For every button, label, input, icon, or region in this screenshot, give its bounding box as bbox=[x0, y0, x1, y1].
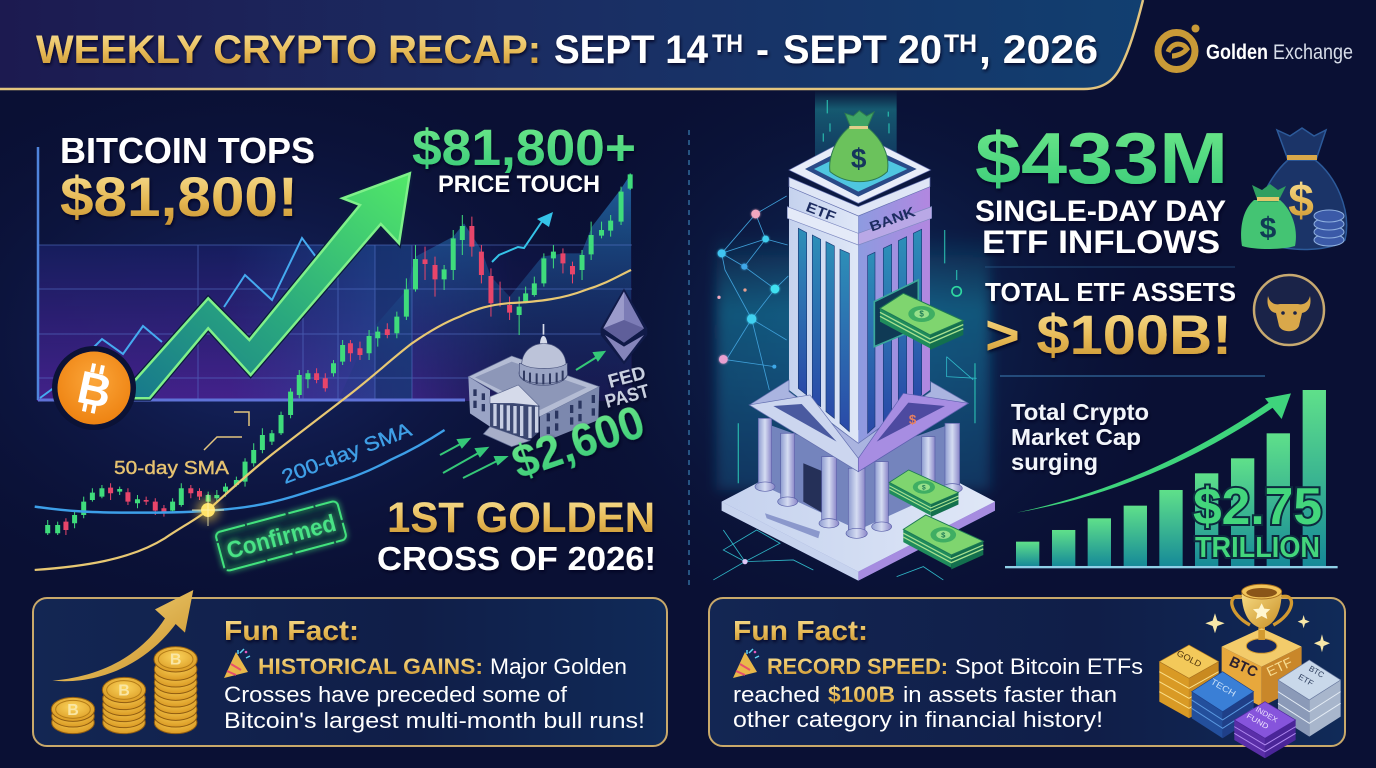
icon: party popper bbox=[733, 649, 759, 678]
tower windows bbox=[798, 228, 922, 433]
value: $2.75 trillion bbox=[1193, 478, 1322, 564]
title: TH bbox=[712, 30, 743, 58]
divider line bbox=[1000, 375, 1265, 377]
icon: money bags: $ bbox=[1260, 212, 1277, 245]
total ETF assets: TOTAL ETF ASSETS bbox=[985, 277, 1236, 307]
panel: ETF building illustration bbox=[713, 90, 995, 581]
golden cross point bbox=[192, 494, 224, 526]
label: Fed past: FED bbox=[606, 363, 648, 393]
title: SEPT 14 bbox=[554, 28, 709, 72]
base axis bbox=[1005, 566, 1338, 568]
BTC ETF cube bbox=[1222, 628, 1302, 707]
50-day SMA line bbox=[35, 270, 631, 570]
silver stack: ETF bbox=[1297, 672, 1315, 688]
panel: market cap chart bbox=[1005, 390, 1338, 568]
fun fact text: reached bbox=[733, 682, 820, 707]
label: market cap: Market Cap bbox=[1011, 424, 1141, 450]
purple stack bbox=[1234, 702, 1296, 758]
title: WEEKLY CRYPTO RECAP: bbox=[36, 28, 541, 72]
bitcoin coin: B bbox=[73, 360, 116, 418]
building portico wall bbox=[762, 423, 957, 530]
price touch label bbox=[412, 119, 636, 198]
purple stack: FUND bbox=[1245, 711, 1270, 731]
BTC ETF cube: ETF bbox=[1264, 654, 1295, 679]
fun fact text bbox=[733, 654, 1143, 732]
fun fact text bbox=[224, 654, 645, 733]
gold stack bbox=[1159, 645, 1219, 718]
teal glow columns bbox=[717, 90, 990, 490]
title: TH bbox=[944, 30, 977, 58]
chart background and grid bbox=[37, 147, 632, 401]
panel: right fun fact bbox=[709, 584, 1345, 758]
label: 200-day SMA: 200-day SMA bbox=[279, 419, 415, 489]
columns bbox=[755, 418, 962, 538]
small green arrows bbox=[440, 352, 604, 478]
fun fact text: HISTORICAL GAINS: bbox=[258, 654, 483, 679]
confirmed stamp: Confirmed bbox=[224, 510, 339, 565]
label: Fed past bbox=[603, 363, 652, 413]
cash slot in tower bbox=[874, 280, 918, 347]
icon: coin stacks with arrow bbox=[51, 590, 197, 734]
divider line bbox=[985, 266, 1235, 268]
tower top slab bbox=[787, 133, 932, 245]
fun fact text: $100B bbox=[828, 682, 895, 707]
title: SEPT 20 bbox=[783, 28, 942, 72]
price touch label: PRICE TOUCH bbox=[438, 171, 600, 198]
blue stack bbox=[1192, 672, 1254, 738]
icon: bull coin bbox=[1254, 275, 1324, 345]
pediment bbox=[749, 380, 968, 472]
fun fact text: other category in financial history! bbox=[733, 707, 1103, 732]
logo: Golden Exchange: Golden bbox=[1206, 41, 1268, 64]
fun fact heading: Fun Fact: bbox=[224, 615, 359, 646]
price touch label: $81,800+ bbox=[412, 119, 636, 176]
cash stack: tower bbox=[880, 293, 963, 350]
heading: Bitcoin tops: $81,800! bbox=[60, 165, 298, 228]
green $2,600: $2,600 bbox=[505, 395, 651, 488]
rising arrow bbox=[1017, 393, 1291, 513]
blue stack: TECH bbox=[1209, 676, 1238, 699]
logo: Golden Exchange bbox=[1158, 24, 1353, 70]
heading: golden cross: CROSS OF 2026! bbox=[377, 540, 656, 577]
icon: ethereum diamond bbox=[601, 288, 647, 364]
label: market cap: surging bbox=[1011, 449, 1098, 475]
fun fact text: Major Golden bbox=[490, 654, 627, 679]
SMA callout bracket bbox=[204, 412, 249, 450]
200-day SMA line bbox=[35, 430, 445, 513]
candlesticks bbox=[48, 173, 630, 535]
fun fact heading: Fun Fact: bbox=[733, 615, 868, 646]
icon: money bags: $ bbox=[1288, 174, 1314, 226]
label: market cap bbox=[1011, 399, 1149, 475]
small cyan arrow bbox=[492, 212, 553, 262]
bars bbox=[1016, 390, 1326, 566]
fun fact text: Spot Bitcoin ETFs bbox=[955, 654, 1143, 679]
label: market cap: Total Crypto bbox=[1011, 399, 1149, 425]
silver stack bbox=[1278, 660, 1341, 737]
title: , 2026 bbox=[979, 28, 1098, 72]
icon: federal reserve building bbox=[468, 324, 599, 447]
wings and roof bbox=[468, 356, 599, 417]
BTC ETF cube: BTC bbox=[1227, 654, 1260, 681]
header banner bbox=[0, 0, 1143, 89]
network nodes bbox=[713, 196, 977, 580]
total ETF assets bbox=[985, 277, 1236, 366]
value: $2.75 trillion: TRILLION bbox=[1195, 532, 1320, 564]
icon: coin stacks with arrow: B bbox=[118, 682, 130, 699]
fun fact text: in assets faster than bbox=[903, 682, 1117, 707]
label: 50-day SMA: 50-day SMA bbox=[114, 457, 230, 478]
bitcoin coin bbox=[52, 346, 136, 430]
ETF inflows label: SINGLE-DAY DAY bbox=[975, 195, 1226, 228]
big green arrow bbox=[132, 173, 410, 398]
icon: money bag on tower bbox=[830, 111, 888, 182]
tower labels bbox=[804, 199, 917, 234]
label: Fed past: PAST bbox=[603, 381, 652, 413]
logo: Golden Exchange: Exchange bbox=[1273, 41, 1353, 64]
ETF inflows label: ETF INFLOWS bbox=[982, 224, 1220, 260]
icon: party popper bbox=[224, 649, 250, 678]
tower walls bbox=[789, 177, 930, 443]
doorway bbox=[803, 463, 823, 513]
portico bbox=[490, 385, 539, 406]
heading: Bitcoin tops: BITCOIN TOPS bbox=[60, 130, 315, 171]
divider bbox=[688, 130, 690, 590]
fun fact text: Crosses have preceded some of bbox=[224, 682, 568, 707]
heading: golden cross bbox=[377, 494, 656, 577]
icon: money bags bbox=[1241, 128, 1347, 249]
silver stack: BTC bbox=[1307, 664, 1326, 680]
heading: Bitcoin tops bbox=[60, 130, 315, 228]
pediment: $ bbox=[909, 412, 917, 427]
fun fact text: Bitcoin's largest multi-month bull runs! bbox=[224, 708, 645, 733]
base platform bbox=[722, 430, 995, 581]
ETF inflows label bbox=[975, 195, 1226, 260]
title: - bbox=[756, 28, 769, 72]
value: $2.75 trillion: $2.75 bbox=[1193, 478, 1322, 536]
dome bbox=[519, 361, 568, 385]
trophy bbox=[1232, 584, 1291, 653]
icon: coin stacks with arrow: B bbox=[67, 702, 79, 719]
panel: left fun fact bbox=[33, 590, 667, 746]
tower labels: ETF bbox=[804, 199, 839, 225]
icon: coin stacks with arrow: B bbox=[170, 652, 181, 669]
thin blue price line bbox=[40, 238, 316, 398]
total ETF assets: > $100B! bbox=[985, 303, 1232, 366]
purple stack: INDEX bbox=[1254, 705, 1279, 724]
network node dots bbox=[717, 210, 779, 564]
title bbox=[36, 28, 1098, 72]
sparkles bbox=[1205, 613, 1330, 652]
panel: golden cross chart bbox=[35, 119, 656, 577]
tower labels: BANK bbox=[867, 203, 917, 234]
heading: golden cross: 1ST GOLDEN bbox=[387, 494, 655, 542]
big $433M: $433M bbox=[975, 119, 1228, 199]
icon: money bag on tower: $ bbox=[851, 143, 867, 174]
gold stack: GOLD bbox=[1175, 648, 1203, 669]
fun fact text: RECORD SPEED: bbox=[767, 654, 948, 679]
icon: trophy and asset blocks bbox=[1159, 584, 1341, 758]
cash stacks: bottom bbox=[889, 470, 983, 569]
